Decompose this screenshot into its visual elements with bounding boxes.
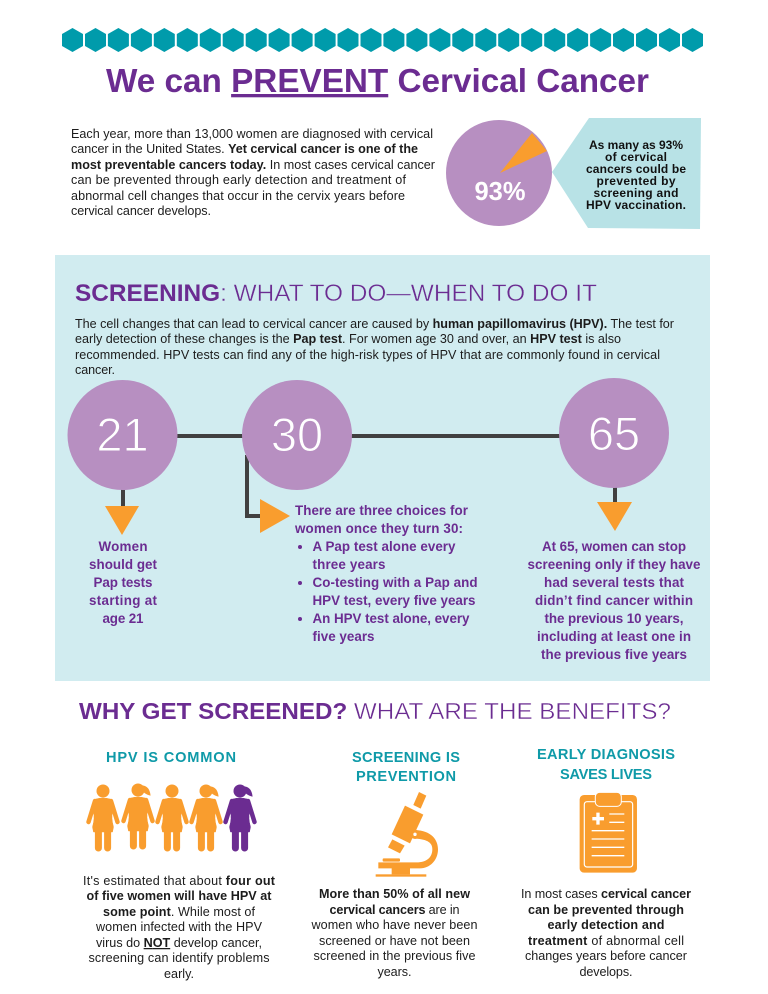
figure 5: purple — [226, 784, 254, 848]
intro paragraph: Each year, more than 13,000 women are diagnosed with cervical — [71, 127, 433, 141]
text: screening is prevention: cervical cancers are in — [330, 903, 460, 917]
heading: screening is prevention: PREVENTION — [356, 769, 456, 785]
text: age 65: the previous 10 years, — [544, 611, 684, 626]
text: hpv is common — [83, 874, 276, 981]
screening paragraph: The cell changes that can lead to cervical cancer are caused by human papillomavirus (HPV). The test for — [75, 317, 674, 331]
text: age 21: Women — [98, 539, 148, 554]
intro paragraph — [71, 127, 435, 218]
text: early diagnosis: changes years before cancer — [525, 949, 687, 963]
title: We can PREVENT Cervical Cancer — [106, 62, 649, 99]
text: age 65: the previous five years — [541, 647, 687, 662]
text: hpv is common: virus do NOT develop cancer, — [96, 936, 262, 950]
screening paragraph: early detection of these changes is the Pap test. For women age 30 and over, an HPV test is also — [75, 332, 621, 346]
text: age 30: three years — [312, 557, 386, 572]
text: early diagnosis — [521, 887, 691, 979]
text: age 30: HPV test, every five years — [312, 593, 476, 608]
age marker: 21: 21 — [96, 408, 149, 461]
intro paragraph: abnormal cell changes that occur in the cervix years before — [71, 189, 405, 203]
callout: as many as 93% — [552, 118, 701, 229]
screening paragraph: cancer. — [75, 363, 115, 377]
text: age 30 — [294, 503, 478, 644]
heading: early diagnosis: EARLY DIAGNOSIS — [537, 747, 675, 763]
text: age 30: women once they turn 30: — [294, 521, 463, 536]
text: early diagnosis: In most cases cervical cancer — [521, 887, 691, 901]
heading: screening is prevention — [352, 750, 460, 785]
callout: as many as 93%: cancers could be — [586, 162, 686, 176]
text: age 30: Co-testing with a Pap and — [312, 575, 478, 590]
text: age 21: age 21 — [102, 611, 144, 626]
age marker: 65: 65 — [588, 407, 640, 460]
text: age 30: A Pap test alone every — [312, 539, 456, 554]
text: hpv is common: of five women will have HPV at — [86, 889, 272, 903]
text: age 30: There are three choices for — [295, 503, 469, 518]
text: age 21 — [89, 539, 158, 626]
text: age 65: including at least one in — [537, 629, 691, 644]
text: screening is prevention: women who have never been — [310, 918, 478, 932]
heading: why get screened: WHY GET SCREENED? WHAT ARE THE BENEFITS? — [79, 698, 671, 724]
text: early diagnosis: treatment of abnormal cell — [528, 934, 684, 948]
figure 4 — [192, 784, 220, 848]
column: screening is prevention — [310, 750, 478, 979]
icon: microscope — [376, 792, 438, 877]
hexagon border row — [62, 28, 703, 52]
pie chart: 93% — [446, 120, 552, 226]
callout: as many as 93%: As many as 93% — [589, 138, 683, 152]
arrow: 65 — [597, 502, 632, 531]
age marker: 30: 30 — [271, 408, 323, 461]
age marker: 21 — [68, 380, 178, 490]
heading: early diagnosis: SAVES LIVES — [560, 767, 652, 783]
text: early diagnosis: can be prevented through — [528, 903, 684, 917]
text: age 65: screening only if they have — [528, 557, 700, 572]
text: hpv is common: early. — [164, 967, 194, 981]
intro paragraph: can be prevented through early detection and treatment of — [71, 173, 406, 187]
text: hpv is common: women infected with the HPV — [95, 920, 263, 934]
text: screening is prevention — [310, 887, 478, 979]
text: hpv is common: some point. While most of — [103, 905, 256, 919]
icon: five women — [88, 784, 254, 848]
panel: screening — [55, 255, 710, 681]
icon: clipboard — [580, 792, 637, 873]
figure 1 — [88, 784, 118, 848]
text: screening is prevention: screened or have not been — [319, 934, 470, 948]
intro paragraph: most preventable cancers today. In most cases cervical cancer — [71, 158, 435, 172]
text: early diagnosis: early detection and — [548, 918, 664, 932]
text: age 65: At 65, women can stop — [542, 539, 686, 554]
text: screening is prevention: screened in the previous five — [314, 949, 476, 963]
screening paragraph — [75, 317, 674, 377]
arrow: 21 — [105, 506, 139, 535]
column: early diagnosis — [521, 747, 691, 979]
heading: screening: SCREENING: WHAT TO DO—WHEN TO DO IT — [75, 280, 597, 307]
age marker: 65 — [559, 378, 669, 488]
callout: as many as 93%: prevented by — [596, 174, 676, 188]
text: screening is prevention: years. — [378, 965, 412, 979]
callout: as many as 93%: of cervical — [605, 150, 667, 164]
screening paragraph: recommended. HPV tests can find any of the high-risk types of HPV that are commonly found in cervical — [75, 348, 660, 362]
heading: hpv is common: HPV IS COMMON — [106, 750, 236, 766]
text: age 21: Pap tests — [94, 575, 152, 590]
figure 3 — [158, 784, 186, 848]
text: age 30: five years — [312, 629, 374, 644]
heading: screening is prevention: SCREENING IS — [352, 750, 460, 766]
text: age 21: should get — [89, 557, 158, 572]
pie chart: 93%: 93% — [474, 178, 526, 206]
text: age 30: An HPV test alone, every — [312, 611, 470, 626]
timeline connectors — [123, 436, 615, 516]
heading: early diagnosis — [537, 747, 675, 783]
column: hpv is common — [83, 750, 276, 981]
text: screening is prevention: More than 50% of all new — [319, 887, 470, 901]
intro paragraph: cancer in the United States. Yet cervical cancer is one of the — [71, 142, 418, 156]
callout: as many as 93%: screening and — [594, 186, 678, 200]
text: early diagnosis: develops. — [580, 965, 632, 979]
age marker: 30 — [242, 380, 352, 490]
text: age 65: didn’t find cancer within — [535, 593, 693, 608]
text: hpv is common: It's estimated that about four out — [83, 874, 276, 888]
callout: as many as 93%: HPV vaccination. — [586, 198, 686, 212]
figure 2 — [124, 784, 152, 846]
arrow: 30 — [260, 499, 290, 533]
text: hpv is common: screening can identify problems — [88, 951, 270, 965]
text: age 65 — [528, 539, 700, 662]
text: age 65: had several tests that — [544, 575, 685, 590]
text: age 21: starting at — [89, 593, 158, 608]
intro paragraph: cervical cancer develops. — [71, 204, 211, 218]
